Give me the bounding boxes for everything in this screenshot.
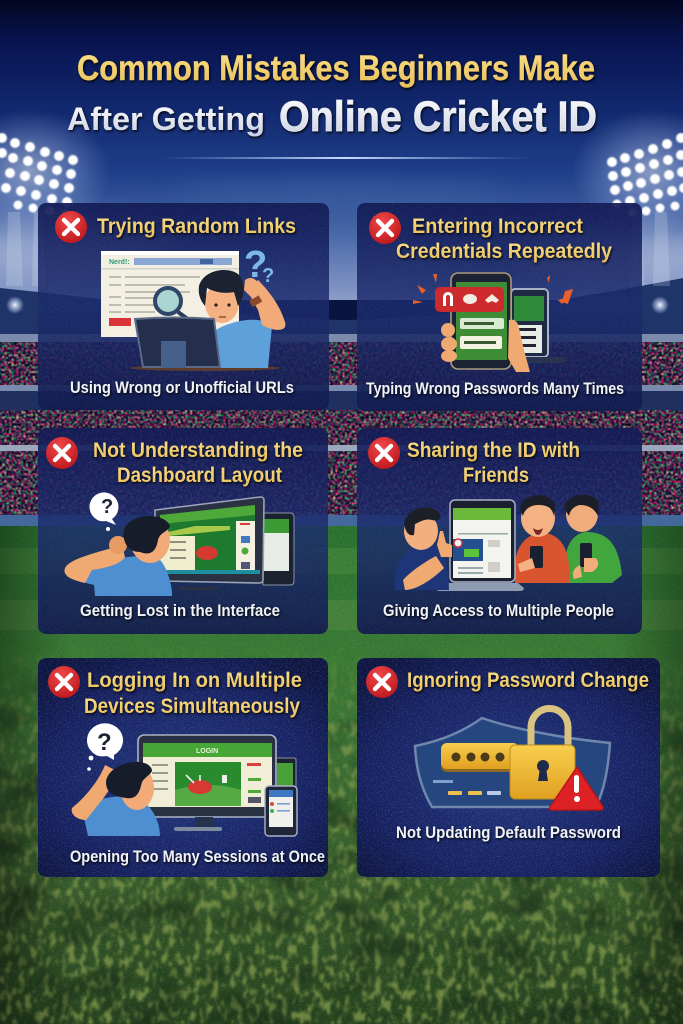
caption: Not Updating Default Password: [396, 823, 621, 842]
icon: red x: [368, 437, 400, 469]
icon: red x: [48, 666, 80, 698]
panel: logging in on multiple devices: [38, 658, 328, 877]
illustration: man looking at dashboard: ?: [101, 496, 113, 518]
heading: Ignoring Password Change: [407, 669, 649, 692]
title line 2: After Getting: After Getting: [67, 101, 265, 137]
panel: entering incorrect credentials: [357, 203, 642, 411]
caption: Opening Too Many Sessions at Once: [70, 847, 325, 866]
icon: red x: [366, 666, 398, 698]
title line 1: Common Mistakes Beginners Make: [77, 49, 595, 88]
illustration: browser and confused man: ?: [244, 244, 267, 286]
caption: Giving Access to Multiple People: [383, 601, 614, 620]
heading: Trying Random Links: [97, 215, 296, 238]
floodlight: left: [0, 110, 110, 286]
title line 2: Online Cricket ID: Online Cricket ID: [279, 93, 597, 141]
panel: trying random links: [38, 203, 329, 410]
caption: Typing Wrong Passwords Many Times: [366, 379, 624, 398]
illustration: man looking at dashboard: [64, 492, 294, 596]
heading: [396, 215, 612, 263]
heading: Logging In on Multiple: [87, 669, 302, 692]
illustration: man with monitor, tablet and phone: [72, 723, 297, 836]
heading: Not Understanding the: [93, 439, 303, 462]
panel: not understanding the dashboard: [38, 428, 328, 634]
caption: Using Wrong or Unofficial URLs: [70, 378, 294, 397]
icon: red x: [369, 212, 401, 244]
heading: [407, 439, 580, 487]
heading: Credentials Repeatedly: [396, 240, 612, 263]
heading: Sharing the ID with: [407, 439, 580, 462]
heading: [93, 439, 303, 487]
heading: Devices Simultaneously: [84, 695, 300, 718]
icon: red x: [55, 211, 87, 243]
panel: ignoring password change: [357, 658, 660, 877]
heading: Dashboard Layout: [117, 464, 282, 487]
illustration: man with monitor, tablet and phone: ?: [97, 729, 112, 756]
illustration: shield, password bar, padlock and warning: [415, 708, 610, 810]
illustration: three friends and laptop: [395, 495, 622, 591]
title divider: [160, 157, 530, 159]
illustration: phone with failed login: [413, 273, 573, 372]
heading: [84, 669, 302, 718]
illustration: browser and confused man: Nerd!:: [109, 259, 130, 266]
icon: red x: [46, 437, 78, 469]
floodlight: right: [572, 110, 683, 286]
heading: Entering Incorrect: [412, 215, 583, 238]
illustration: man with monitor, tablet and phone: LOGIN: [196, 748, 218, 755]
illustration: browser and confused man: [101, 244, 285, 371]
title: [67, 49, 597, 141]
heading: Friends: [463, 464, 529, 487]
panel: sharing the ID with friends: [357, 428, 642, 634]
illustration: browser and confused man: ?: [262, 265, 274, 287]
caption: Getting Lost in the Interface: [80, 601, 280, 620]
